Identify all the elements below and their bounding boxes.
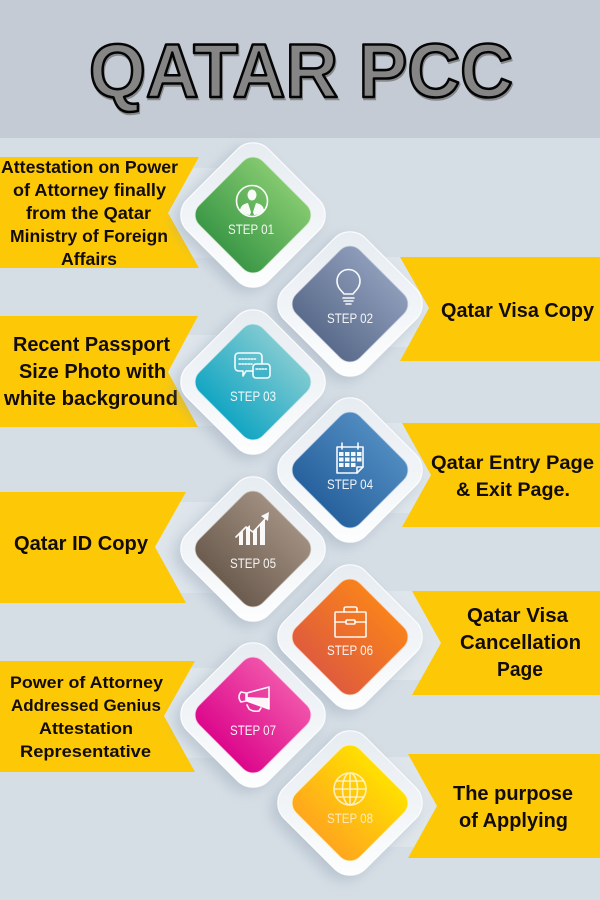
step 04 ribbon: Qatar Entry Page — [431, 453, 594, 474]
step 07 ribbon — [0, 661, 195, 772]
step 06 ribbon — [412, 591, 600, 695]
step 08 ribbon — [408, 754, 600, 858]
step 02 ribbon: Qatar Visa Copy — [441, 300, 595, 322]
step 08 ribbon: of Applying — [459, 810, 568, 832]
step 03 ribbon: Size Photo with — [19, 361, 166, 383]
step 01 ribbon: from the Qatar — [26, 203, 151, 223]
step 03 diamond — [172, 301, 334, 463]
step 01 ribbon: of Attorney finally — [13, 180, 166, 200]
step 02 ribbon — [400, 257, 600, 361]
step label: STEP 03 — [230, 388, 276, 404]
step 04 diamond — [269, 389, 431, 551]
step 03 ribbon — [0, 316, 198, 427]
step label: STEP 07 — [230, 722, 276, 738]
title: QATAR PCC — [89, 29, 513, 114]
icon: globe — [334, 773, 366, 805]
step 06 diamond — [269, 556, 431, 718]
step 07 ribbon: Addressed Genius — [11, 697, 161, 715]
step 06 ribbon: Cancellation — [460, 632, 581, 654]
step 01 ribbon: Attestation on Power — [1, 157, 178, 177]
step 07 ribbon: Attestation — [39, 720, 133, 738]
icon: calendar — [337, 443, 363, 473]
step 04 ribbon: & Exit Page. — [456, 480, 570, 501]
step 01 ribbon: Affairs — [61, 249, 117, 269]
icon: businessman — [236, 186, 268, 216]
step 08 diamond — [269, 722, 431, 884]
step 05 diamond — [172, 468, 334, 630]
step 07 ribbon: Representative — [20, 743, 151, 761]
title: QATAR PCC — [90, 31, 514, 116]
step label: STEP 02 — [327, 310, 373, 326]
step label: STEP 01 — [228, 221, 274, 237]
step 07 diamond — [172, 634, 334, 796]
step 01 diamond — [172, 134, 334, 296]
title band — [0, 0, 600, 138]
step 05 ribbon: Qatar ID Copy — [14, 533, 149, 555]
step label: STEP 06 — [327, 642, 373, 658]
step 03 ribbon: white background — [3, 388, 178, 410]
step 08 ribbon: The purpose — [453, 783, 573, 805]
step 01 ribbon — [0, 157, 199, 269]
step 06 ribbon: Qatar Visa — [467, 605, 569, 627]
step label: STEP 08 — [327, 810, 373, 826]
step 03 ribbon: Recent Passport — [13, 334, 170, 356]
icon: speech bubbles — [235, 353, 270, 378]
step 05 ribbon — [0, 492, 186, 603]
step label: STEP 04 — [327, 476, 373, 492]
step label: STEP 05 — [230, 555, 276, 571]
step 04 ribbon — [402, 423, 600, 527]
icon: briefcase — [335, 607, 366, 637]
step 06 ribbon: Page — [497, 659, 543, 681]
icon: megaphone — [239, 687, 269, 711]
step 07 ribbon: Power of Attorney — [10, 674, 164, 692]
step 02 diamond — [269, 223, 431, 385]
icon: growth chart — [236, 512, 269, 545]
step 01 ribbon: Ministry of Foreign — [10, 226, 168, 246]
icon: light bulb — [337, 270, 360, 304]
